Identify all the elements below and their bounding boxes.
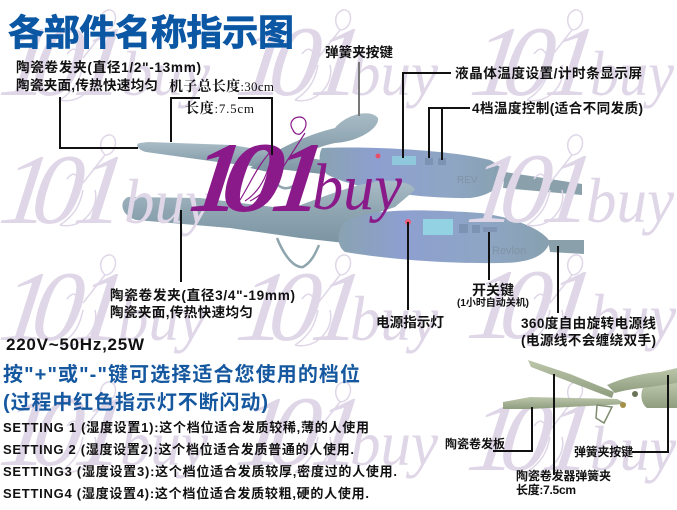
label: ceramic plate: 陶瓷卷发板 — [445, 436, 505, 451]
label: swivel cord: (电源线不会缠绕双手) — [521, 332, 656, 348]
label: spring clip length: 长度:7.5cm — [516, 482, 576, 497]
label: spring clip length — [516, 468, 611, 497]
watermark row over the irons: buy — [124, 166, 213, 237]
label: 13mm barrel: 陶瓷夹面,传热快速均匀 — [16, 77, 158, 93]
label: total length: 机子总长度:30cm — [169, 78, 274, 95]
background watermark: buy — [122, 38, 211, 109]
background watermark: buy — [350, 38, 439, 109]
background watermark: 101 — [231, 250, 372, 362]
main 101buy logo: 1 — [185, 121, 251, 233]
label: 13mm barrel — [16, 59, 201, 93]
main 101buy logo: buy — [312, 151, 403, 224]
settings list: SETTING 1 (湿度设置1):这个档位适合发质较稀,薄的人使用 — [3, 420, 369, 435]
voltage spec: 220V~50Hz,25W — [6, 335, 145, 354]
main 101buy logo: 0 — [217, 122, 291, 233]
watermark row over the irons — [0, 132, 675, 245]
leader lines — [60, 62, 558, 313]
settings list: SETTING3 (湿度设置3):这个档位适合发质较厚,密度过的人使用. — [3, 464, 397, 479]
label: swivel cord — [521, 315, 656, 348]
background watermark: buy — [118, 283, 207, 354]
background watermark: buy — [350, 283, 439, 354]
label: 19mm barrel: 陶瓷卷发夹(直径3/4"-19mm) — [110, 287, 295, 303]
background watermark: 101 — [231, 5, 372, 117]
curling iron: bottom 19mm: Revlon — [492, 245, 526, 257]
label: spring clip button: 弹簧夹按键 — [325, 44, 393, 60]
title: 各部件名称指示图 — [8, 12, 294, 53]
settings list: SETTING4 (湿度设置4):这个档位适合发质较粗,硬的人使用. — [3, 486, 369, 501]
detail photo leader lines — [493, 374, 668, 475]
label: 19mm barrel: 陶瓷夹面,传热快速均匀 — [110, 304, 253, 320]
label: swivel cord: 360度自由旋转电源线 — [521, 315, 656, 331]
label: LCD display: 液晶体温度设置/计时条显示屏 — [455, 65, 642, 81]
main 101buy logo: 1 — [267, 121, 333, 233]
label: spring clip button detail: 弹簧夹按键 — [574, 444, 633, 459]
watermark row over the irons: buy — [586, 165, 675, 236]
background watermark: buy — [120, 408, 209, 479]
detail photo: open spring clip — [503, 360, 677, 423]
background watermark: 101 — [465, 5, 606, 117]
label: spring clip length: 陶瓷卷发器弹簧夹 — [516, 468, 611, 483]
blue instruction heading — [3, 362, 360, 414]
blue instruction heading: 按"+"或"-"键可选择适合您使用的档位 — [3, 362, 360, 386]
curling iron: top 13mm: REV — [457, 175, 478, 186]
background watermark: 101 — [462, 248, 603, 360]
settings list — [3, 420, 397, 501]
watermark row over the irons: 101 — [462, 132, 603, 244]
blue instruction heading: (过程中红色指示灯不断闪动) — [3, 391, 268, 414]
label: power indicator: 电源指示灯 — [376, 314, 444, 330]
label: power switch — [457, 282, 529, 309]
label: 13mm barrel: 陶瓷卷发夹(直径1/2"-13mm) — [16, 59, 201, 75]
settings list: SETTING 2 (湿度设置2):这个档位适合发质普通的人使用. — [3, 442, 354, 457]
label: power switch: (1小时自动关机) — [457, 296, 529, 309]
label: power switch: 开关键 — [472, 282, 514, 298]
main 101buy logo — [185, 117, 403, 233]
label: 4 temperature settings: 4档温度控制(适合不同发质) — [472, 100, 643, 116]
curling iron: top 13mm — [137, 113, 582, 198]
label: barrel length: 长度:7.5cm — [185, 100, 254, 117]
curling iron: bottom 19mm — [122, 181, 584, 267]
background watermark: 101 — [462, 380, 603, 492]
background watermark: 101 — [231, 375, 372, 487]
background watermark: buy — [350, 408, 439, 479]
label: 19mm barrel — [110, 287, 295, 320]
